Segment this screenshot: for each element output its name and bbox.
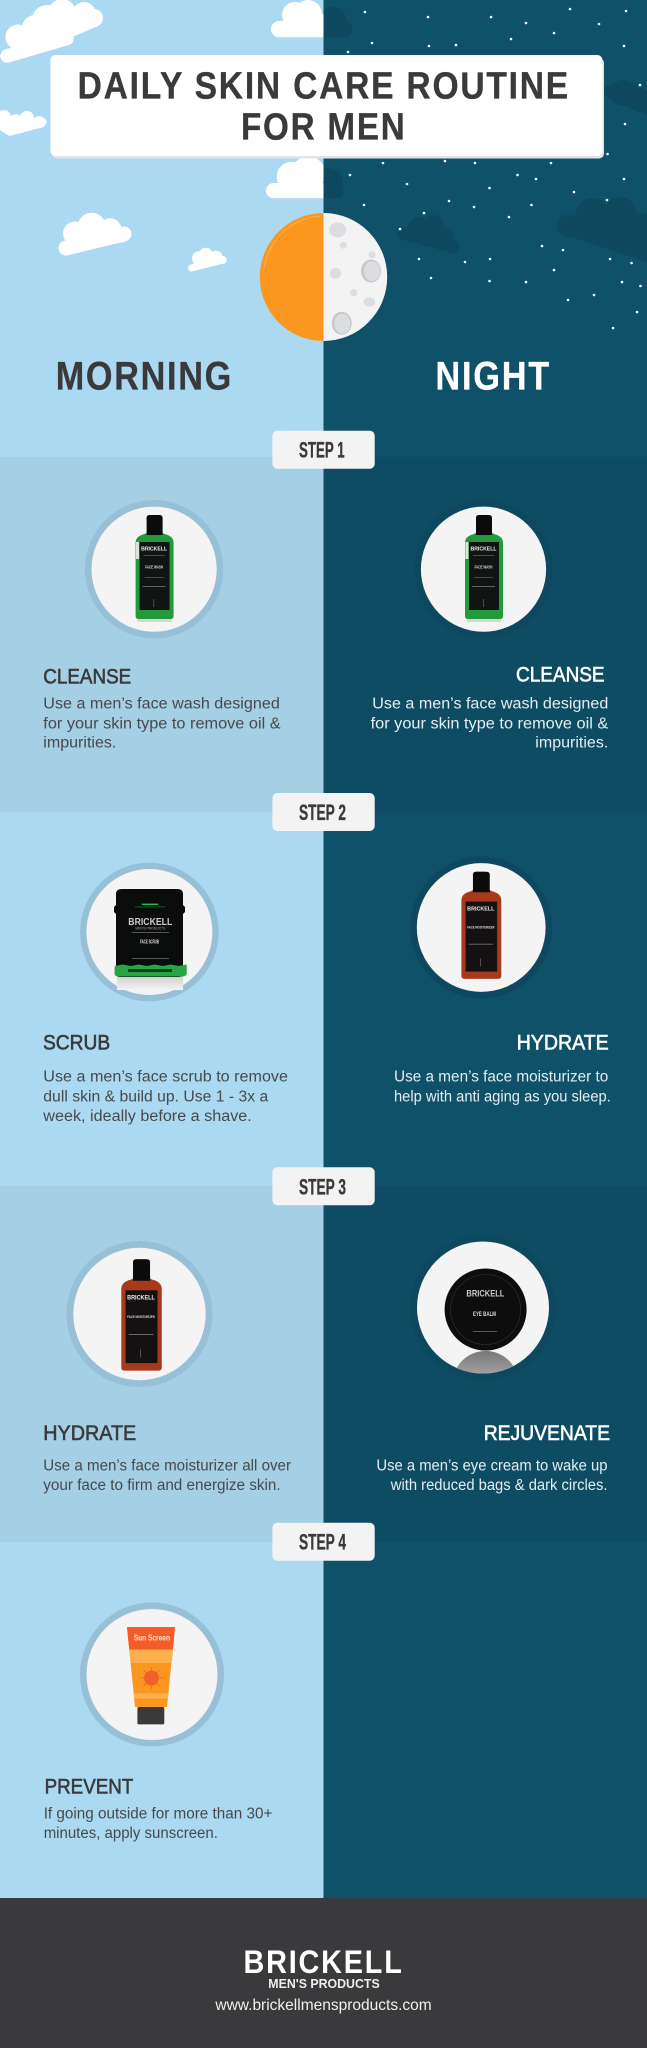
icon: face scrub jar: FACE SCRUB (140, 939, 159, 945)
logo: BRICKELL (244, 1944, 404, 1980)
heading: scrub: SCRUB (43, 1031, 110, 1054)
panel: step 2 morning (42, 863, 288, 1125)
body: prevent: minutes, apply sunscreen. (44, 1825, 218, 1842)
step badge 2 (272, 793, 375, 831)
body: cleanse night (371, 695, 609, 752)
clouds: day sky (0, 0, 227, 271)
icon: eye balm tin (444, 1268, 527, 1374)
body: cleanse night: impurities. (535, 735, 608, 752)
icon: face scrub jar: BRICKELL (128, 917, 172, 928)
heading: night: NIGHT (435, 354, 551, 398)
step badge 1: STEP 1 (299, 438, 345, 463)
product circle: sunscreen (80, 1602, 224, 1746)
panel: step 1 morning (0, 457, 324, 812)
panel: step 3 night (378, 1234, 610, 1494)
body: scrub: dull skin & build up. Use 1 - 3x a (43, 1089, 269, 1106)
background: morning side (0, 0, 324, 1898)
product circle: face wash (414, 500, 553, 638)
icon: green face wash bottle (465, 515, 503, 622)
icon: green face wash bottle (136, 515, 174, 622)
body: scrub: Use a men’s face scrub to remove (43, 1069, 288, 1086)
panel: step 2 night (394, 856, 611, 1106)
icon: red moisturizer bottle (461, 872, 501, 979)
body: prevent (44, 1806, 272, 1842)
panel: step 3 morning (0, 1186, 324, 1542)
heading: prevent: PREVENT (45, 1775, 133, 1798)
heading: hydrate: HYDRATE (43, 1422, 136, 1445)
body: rejuvenate: with reduced bags & dark circles. (390, 1477, 608, 1494)
icon: face scrub jar: MEN'S PRODUCTS (135, 926, 166, 930)
icon: green face wash bottle: FACE WASH (145, 564, 163, 570)
body: cleanse morning: Use a men’s face wash designed (43, 695, 280, 712)
step badge 3: STEP 3 (299, 1174, 346, 1199)
panel: step 1 night (324, 457, 647, 812)
title text: DAILY SKIN CARE ROUTINE (78, 65, 570, 107)
body: scrub: week, ideally before a shave. (42, 1108, 252, 1125)
icon: sunscreen tube: Sun Screen (134, 1634, 170, 1642)
clouds: night sky (398, 80, 647, 263)
body: cleanse night: for your skin type to remove oil & (371, 715, 609, 732)
body: rejuvenate: Use a men’s eye cream to wake up (376, 1458, 608, 1475)
body: prevent: If going outside for more than 30+ (44, 1806, 272, 1823)
icon: half sun half moon (260, 213, 387, 341)
icon: red moisturizer bottle: BRICKELL (467, 906, 495, 912)
body: hydrate night (394, 1069, 611, 1106)
product circle: eye balm (417, 1242, 549, 1374)
icon: face scrub jar (114, 889, 187, 990)
body: hydrate morning: Use a men’s face moisturizer all over (43, 1458, 291, 1475)
body: scrub (42, 1069, 288, 1125)
icon: eye balm tin: EYE BALM (473, 1311, 496, 1318)
heading: morning: MORNING (56, 354, 233, 398)
body: hydrate night: Use a men’s face moisturizer to (394, 1069, 608, 1086)
title card (50, 55, 604, 158)
heading: rejuvenate: REJUVENATE (484, 1422, 610, 1445)
title text (78, 65, 570, 148)
website: www.brickellmensproducts.com (214, 1997, 432, 2014)
icon: green face wash bottle: BRICKELL (141, 546, 168, 552)
heading: cleanse: CLEANSE (43, 665, 131, 688)
step badge 4 (272, 1523, 375, 1561)
body: cleanse morning: for your skin type to remove oil & (43, 715, 281, 732)
icon: green face wash bottle: FACE WASH (474, 564, 492, 570)
icon: red moisturizer bottle: FACE MOISTURIZER (467, 925, 495, 929)
body: cleanse morning (43, 695, 281, 752)
step badge 1 (272, 431, 375, 469)
icon: sunscreen tube (127, 1627, 175, 1724)
product circle: face wash (85, 500, 223, 638)
step badge 2: STEP 2 (299, 800, 346, 825)
title text: FOR MEN (241, 106, 406, 148)
body: cleanse night: Use a men’s face wash designed (372, 695, 608, 712)
product circle: face moisturizer (66, 1241, 212, 1387)
icon: red moisturizer bottle: BRICKELL (127, 1295, 155, 1301)
body: hydrate morning: your face to firm and energize skin. (43, 1477, 281, 1494)
icon: green face wash bottle: BRICKELL (470, 546, 497, 552)
logo: MEN'S PRODUCTS (268, 1976, 380, 1991)
body: hydrate morning (43, 1458, 291, 1494)
heading: cleanse: CLEANSE (516, 664, 605, 687)
step badge 4: STEP 4 (299, 1530, 346, 1555)
product circle: face scrub (80, 863, 219, 1001)
background: night side (324, 0, 647, 1898)
footer (0, 1898, 647, 2048)
stars (347, 8, 642, 329)
body: cleanse morning: impurities. (43, 735, 116, 752)
icon: red moisturizer bottle: FACE MOISTURIZER (127, 1315, 155, 1319)
icon: eye balm tin: BRICKELL (466, 1289, 505, 1299)
product circle: face moisturizer (410, 856, 552, 998)
icon: red moisturizer bottle (121, 1259, 162, 1371)
panel: step 4 morning (44, 1602, 272, 1842)
clouds: straddling the divider (266, 0, 352, 198)
body: rejuvenate (376, 1458, 608, 1494)
heading: hydrate: HYDRATE (517, 1031, 609, 1054)
body: hydrate night: help with anti aging as you sleep. (394, 1089, 611, 1106)
step badge 3 (272, 1167, 375, 1205)
